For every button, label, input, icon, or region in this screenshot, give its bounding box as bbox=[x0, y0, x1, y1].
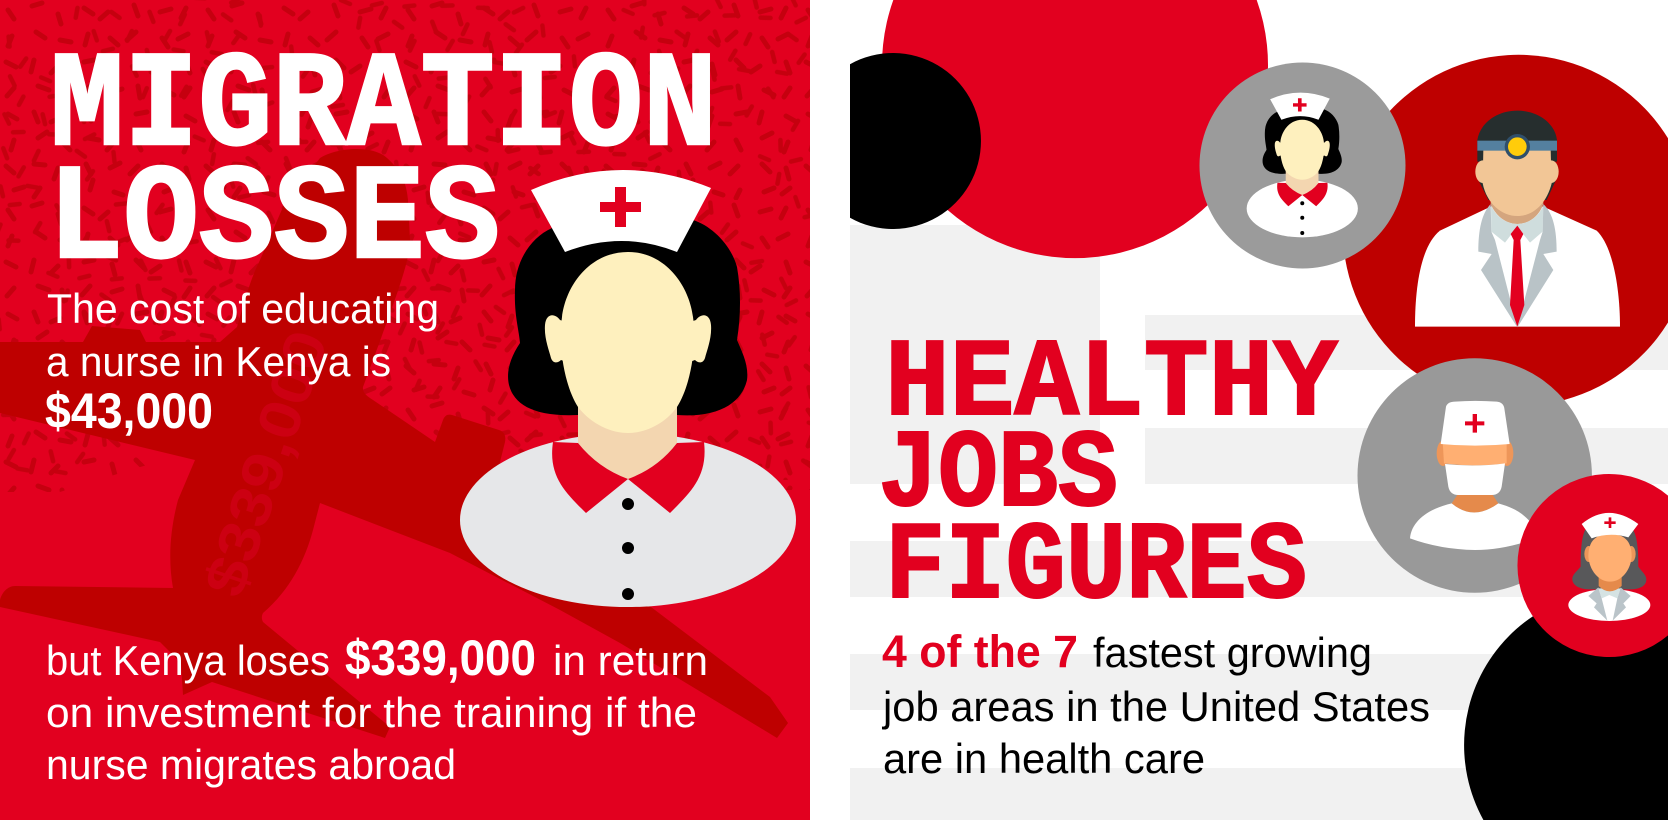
text: return on investment: $339,000 bbox=[345, 630, 536, 686]
text: cost of educating: The cost of educating bbox=[47, 285, 439, 332]
panel: healthy jobs figures bbox=[850, 0, 1668, 820]
title: healthy jobs figures: HEALTHY bbox=[885, 323, 1338, 448]
text: fastest growing job areas: are in health care bbox=[883, 735, 1205, 782]
text: return on investment: on investment for the training if the bbox=[46, 689, 697, 736]
background dash texture bbox=[0, 0, 810, 492]
text: return on investment: in return bbox=[553, 637, 708, 684]
plane lettering: $339,000 bbox=[192, 323, 341, 604]
panel: migration losses bbox=[0, 0, 810, 820]
text: fastest growing job areas: 4 of the 7 bbox=[882, 626, 1078, 677]
text: fastest growing job areas bbox=[881, 626, 1430, 782]
text: return on investment bbox=[46, 630, 708, 788]
large red circle bbox=[882, 0, 1268, 258]
title: migration losses: MIGRATION bbox=[50, 31, 717, 185]
title: healthy jobs figures: JOBS bbox=[878, 414, 1118, 539]
small red circle bbox=[1517, 474, 1668, 657]
icon: doctor bbox=[1415, 111, 1620, 327]
nurse circle bbox=[1200, 62, 1406, 268]
text: return on investment: but Kenya loses bbox=[46, 637, 330, 684]
surgeon circle bbox=[1358, 358, 1592, 593]
doctor circle bbox=[1343, 55, 1668, 406]
text: cost of educating: a nurse in Kenya is bbox=[46, 338, 391, 385]
text: fastest growing job areas: job areas in the United States bbox=[881, 683, 1430, 730]
text: cost of educating: $43,000 bbox=[45, 383, 213, 439]
title: healthy jobs figures: FIGURES bbox=[885, 506, 1307, 631]
black circle bbox=[850, 53, 981, 229]
text: fastest growing job areas: fastest growing bbox=[1093, 629, 1372, 676]
icon: surgeon bbox=[1410, 401, 1540, 550]
icon: nurse with coat bbox=[1568, 513, 1650, 621]
icon: small nurse bbox=[1247, 93, 1358, 237]
title: migration losses bbox=[54, 52, 710, 260]
title: migration losses: LOSSES bbox=[48, 144, 500, 298]
large black circle bbox=[1464, 590, 1668, 820]
text: return on investment: nurse migrates abroad bbox=[46, 741, 456, 788]
text: cost of educating bbox=[45, 285, 439, 439]
title: healthy jobs figures bbox=[878, 323, 1338, 631]
icon: large nurse bbox=[460, 170, 796, 607]
background stripes bbox=[850, 225, 1668, 820]
